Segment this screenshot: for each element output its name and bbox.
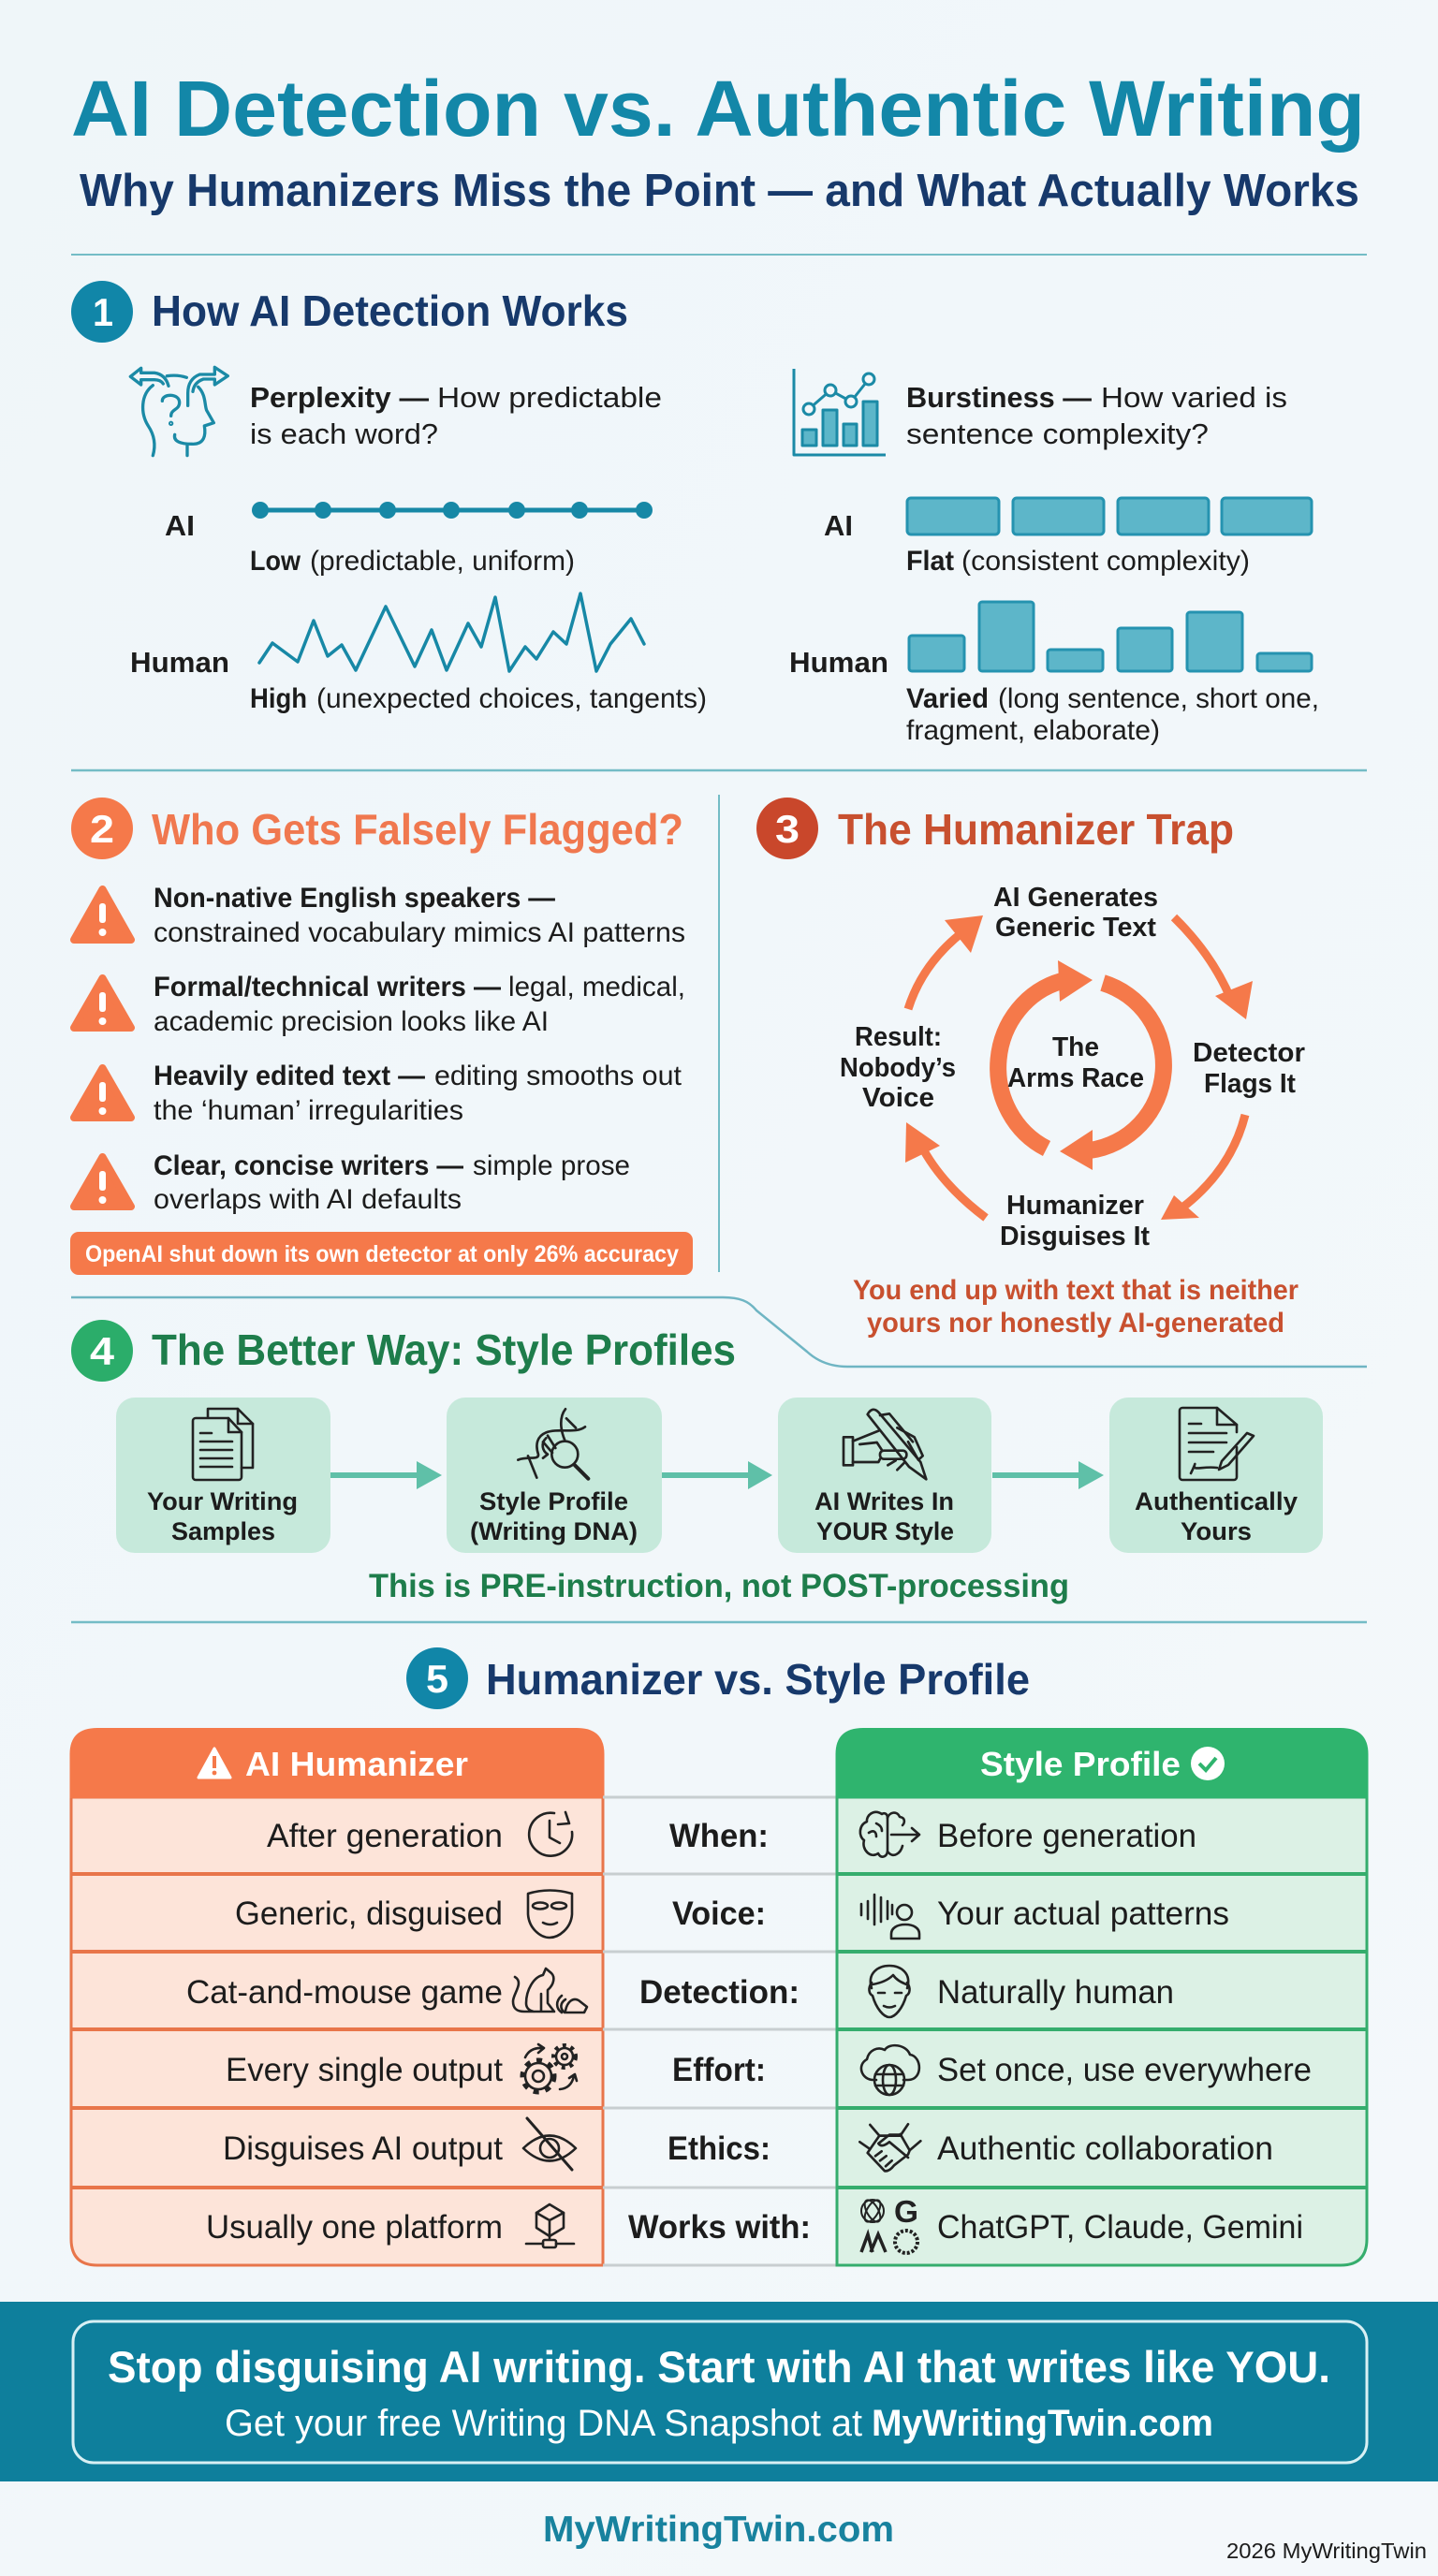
CTA subline: Get your free Writing DNA Snapshot at [225,2403,862,2444]
warning item 1 [74,883,685,948]
cycle step labels: Voice [862,1083,934,1113]
title: AI Detection vs. Authentic Writing [71,65,1365,153]
icon: crossed eye [523,2118,576,2170]
panel: section 2 who gets falsely flagged [70,798,693,1275]
perplexity definition: Perplexity — [250,381,429,414]
warning item 2 [74,972,685,1037]
icon: brain with arrow [860,1812,919,1857]
step: AI writes in your style: YOUR Style [816,1517,954,1545]
panel: section 5 comparison table [69,1647,1369,2265]
icon: AI platform logos: G [894,2194,918,2229]
row labels left: Cat-and-mouse game [186,1974,503,2011]
icon: cat and mouse [513,1969,587,2012]
caption: trap conclusion [853,1275,1299,1339]
CTA subline [225,2403,1213,2444]
section 1 badge: 1 [93,290,113,334]
section 4 badge [71,1320,133,1382]
tagline: pre-instruction: This is PRE-instruction, not POST-processing [369,1568,1069,1604]
table column: criteria: Ethics: [668,2130,770,2167]
section 3 badge [756,798,818,859]
inner cycle: arms race: Arms Race [1007,1063,1144,1093]
footer copyright: 2026 MyWritingTwin [1226,2539,1427,2563]
row labels right: Your actual patterns [937,1895,1229,1932]
arrow: result to generates [908,915,983,1009]
row labels left: Usually one platform [206,2209,503,2246]
section 2 heading: Who Gets Falsely Flagged? [152,805,683,854]
warning item 2: legal, medical, [508,972,685,1003]
icon: head with diverging arrows [130,367,227,456]
icon: mask [528,1891,572,1938]
row labels left [186,1818,503,2246]
burstiness definition: sentence complexity? [906,417,1209,450]
table column: criteria: Detection: [639,1974,800,2011]
warning item 3: the ‘human’ irregularities [154,1095,463,1126]
table column: style profile [835,1728,1369,2265]
column header: style profile: Style Profile [980,1745,1181,1783]
perplexity human row: Human [130,646,229,679]
warning item 2: Formal/technical writers — [154,972,501,1003]
burstiness human row: Varied [906,683,989,714]
cycle step labels: Disguises It [1000,1222,1150,1251]
arrow: step 2 to 3 [662,1461,772,1489]
row labels right: Naturally human [937,1974,1174,2011]
perplexity definition: How predictable [437,381,662,414]
subtitle: Why Humanizers Miss the Point — and What Actually Works [80,166,1359,216]
icon: handshake [859,2124,920,2171]
caption: trap conclusion: yours nor honestly AI-generated [867,1308,1284,1339]
cycle step labels: Detector [1193,1038,1305,1068]
icon: human face [869,1966,910,2017]
icon: cube on network [526,2204,574,2247]
warning item 4: Clear, concise writers — [154,1150,463,1181]
column header: AI humanizer: AI Humanizer [245,1745,468,1783]
section 1 badge [71,281,133,343]
burstiness human row: (long sentence, short one, [998,683,1319,714]
icon: hand with pen [844,1410,926,1479]
warning item 3: editing smooths out [434,1061,682,1091]
icon: voice waveform with person [861,1895,919,1939]
burstiness human row: Human [789,646,888,679]
arrow: generates to detector [1174,917,1253,1019]
row labels right: Authentic collaboration [937,2130,1273,2167]
inner cycle: arms race: The [1052,1032,1099,1062]
step: your writing samples [116,1398,330,1553]
cycle step labels: Humanizer [1006,1191,1144,1221]
table column: criteria: When: [669,1818,769,1854]
warning item 4: overlaps with AI defaults [154,1184,462,1215]
perplexity human row: (unexpected choices, tangents) [316,683,707,714]
step: style profile: Style Profile [479,1487,628,1515]
row labels right [937,1818,1312,2246]
caption: trap conclusion: You end up with text that is neither [853,1275,1299,1306]
perplexity AI row: Low [250,546,301,577]
icon: cloud with globe [861,2045,919,2095]
row labels right: Set once, use everywhere [937,2052,1312,2088]
table column: criteria: Works with: [628,2209,811,2246]
burstiness human row [789,602,1319,746]
icon: documents [193,1409,253,1480]
step: style profile [447,1398,662,1553]
warning item 3 [74,1061,682,1126]
perplexity AI row [165,502,653,577]
cycle step labels: AI Generates [993,883,1158,913]
burstiness AI row: AI [824,509,853,542]
CTA headline: Stop disguising AI writing. Start with AI that writes like YOU. [108,2342,1330,2392]
CTA subline: MyWritingTwin.com [872,2403,1213,2444]
section 2 badge [71,798,133,859]
table column: criteria: Voice: [672,1895,766,1932]
section 5 heading: Humanizer vs. Style Profile [486,1655,1030,1704]
inner cycle: arms race [998,960,1164,1170]
panel: section 1 how AI detection works [71,281,1319,746]
section 5 badge [406,1647,468,1709]
row labels left: Generic, disguised [235,1895,503,1932]
section 4 badge: 4 [90,1329,115,1373]
table column: criteria [603,1797,837,2265]
row labels right: ChatGPT, Claude, Gemini [937,2209,1303,2246]
CTA banner [0,2302,1438,2481]
row labels left: Disguises AI output [223,2130,503,2167]
perplexity human row: High [250,683,307,714]
burstiness definition: How varied is [1101,381,1287,414]
panel: section 3 the humanizer trap [756,798,1305,1339]
warning item 4: simple prose [473,1150,630,1181]
icon: signed document with pen [1180,1408,1254,1480]
row labels left: Every single output [226,2052,503,2088]
section 3 heading: The Humanizer Trap [838,805,1234,854]
perplexity human row [130,593,707,714]
arrow: humanizer to result [905,1122,986,1218]
cycle step labels: Generic Text [995,913,1156,943]
section 5 badge: 5 [426,1657,448,1701]
icon: bar chart with trend line [794,369,886,455]
arrow: detector to humanizer [1161,1115,1245,1220]
table column: criteria: Effort: [672,2052,766,2088]
step: authentically yours: Yours [1181,1517,1252,1545]
step: authentically yours: Authentically [1135,1487,1298,1515]
burstiness AI row: Flat [906,546,954,577]
section 4 heading: The Better Way: Style Profiles [152,1325,736,1374]
burstiness AI row: (consistent complexity) [961,546,1250,577]
arrow: step 3 to 4 [992,1461,1104,1489]
step: authentically yours [1109,1398,1323,1553]
icon: AI platform logos [861,2194,918,2253]
icon: DNA with magnifier [518,1409,588,1479]
footer brand: MyWritingTwin.com [543,2510,894,2550]
cycle step labels: Result: [855,1022,942,1052]
warning item 4 [74,1150,630,1215]
cycle step labels [840,883,1305,1251]
callout: openai stat: OpenAI shut down its own detector at only 26% accuracy [85,1241,679,1267]
row labels left: After generation [267,1818,503,1854]
perplexity definition [250,381,662,450]
table column: AI humanizer [69,1728,605,2265]
icon: clock [529,1812,572,1856]
section 3 badge: 3 [775,807,800,851]
warning item 2: academic precision looks like AI [154,1006,549,1037]
panel: section 4 the better way [71,1320,1323,1604]
step: AI writes in your style: AI Writes In [814,1487,954,1515]
burstiness human row: fragment, elaborate) [906,715,1160,746]
section 1 heading: How AI Detection Works [152,286,628,335]
perplexity AI row: AI [165,509,195,542]
step: AI writes in your style [778,1398,991,1553]
arrow: step 1 to 2 [330,1461,442,1489]
perplexity AI row: (predictable, uniform) [310,546,575,577]
burstiness definition: Burstiness — [906,381,1092,414]
perplexity definition: is each word? [250,417,438,450]
step: your writing samples: Your Writing [147,1487,298,1515]
cycle step labels: Nobody’s [840,1053,956,1083]
warning item 3: Heavily edited text — [154,1061,425,1091]
step: your writing samples: Samples [171,1517,275,1545]
warning item 1: constrained vocabulary mimics AI patterns [154,917,685,948]
row labels right: Before generation [937,1818,1196,1854]
cycle step labels: Flags It [1204,1069,1296,1099]
callout: openai stat [70,1232,693,1275]
warning item 1: Non-native English speakers — [154,883,555,914]
burstiness AI row [824,498,1312,577]
section 2 badge: 2 [90,807,114,851]
burstiness definition [906,381,1287,450]
step: style profile: (Writing DNA) [470,1517,638,1545]
icon: gears with arrows [522,2044,577,2092]
